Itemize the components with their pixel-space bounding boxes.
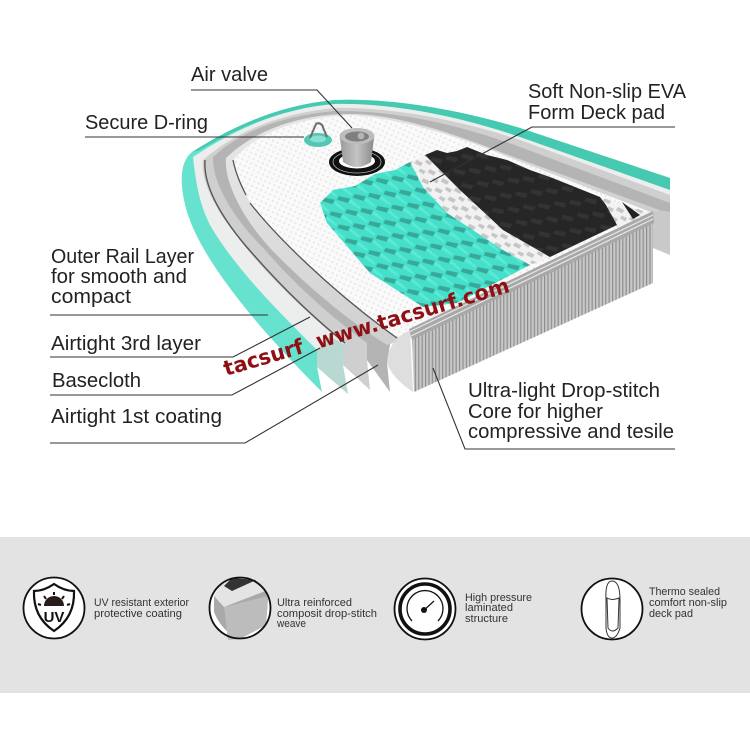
text: ultra reinforced: Ultra reinforced <box>277 597 352 609</box>
label: airtight 1st coating: Airtight 1st coating <box>51 406 222 428</box>
sheet: airtight 1st coating <box>213 111 670 392</box>
sheet: basecloth <box>203 108 670 390</box>
label: outer rail layer: for smooth and <box>51 266 187 288</box>
text: thermo sealed: deck pad <box>649 608 693 620</box>
label: airtight 1st coating <box>50 365 378 443</box>
text: thermo sealed: Thermo sealed <box>649 586 720 598</box>
label: outer rail layer <box>50 246 268 315</box>
watermark: tacsurf www.tacsurf.com <box>221 273 512 381</box>
label: ultra-light drop-stitch core: compressive and tesile <box>468 421 674 443</box>
label: airtight 3rd layer: Airtight 3rd layer <box>51 333 201 355</box>
black deck pad <box>425 147 617 257</box>
label: soft non-slip EVA form deck pad <box>430 81 687 182</box>
inner band <box>226 114 665 345</box>
label: secure D-ring: Secure D-ring <box>85 112 208 134</box>
label: outer rail layer: compact <box>51 286 131 308</box>
text: ultra reinforced: weave <box>276 618 306 630</box>
bottom feature band <box>0 537 750 693</box>
white grey deck pad strip <box>410 155 550 265</box>
label: basecloth <box>50 348 320 395</box>
icon: drop-stitch weave <box>210 578 270 640</box>
right end flaps <box>653 211 670 255</box>
label: ultra-light drop-stitch core: Core for higher <box>468 401 603 423</box>
label: outer rail layer: Outer Rail Layer <box>51 246 194 268</box>
text: high pressure: laminated <box>465 602 513 614</box>
label: soft non-slip EVA form deck pad: Soft Non-slip EVA <box>528 81 687 103</box>
drop-stitch core side <box>412 222 653 392</box>
text: high pressure: structure <box>465 613 508 625</box>
text: ultra reinforced: composit drop-stitch <box>277 608 377 620</box>
teal deck pad <box>320 162 530 307</box>
label: soft non-slip EVA form deck pad: Form Deck pad <box>528 102 665 124</box>
label: airtight 3rd layer <box>50 317 310 357</box>
core top lip <box>409 211 654 340</box>
label: ultra-light drop-stitch core: Ultra-light Drop-stitch <box>468 380 660 402</box>
sheet: airtight 3rd layer <box>193 104 670 394</box>
board cutaway illustration <box>182 100 670 394</box>
icon: board <box>582 578 642 640</box>
text: UV resistant: UV resistant exterior <box>94 597 189 609</box>
outer teal rail layer <box>182 100 670 392</box>
fin: airtight 3rd layer end <box>317 336 348 394</box>
icon: UV shield <box>24 578 84 638</box>
deck edge dark lines <box>233 160 397 338</box>
small black pad corner <box>622 202 640 219</box>
top teal band <box>192 100 670 192</box>
icon: pressure gauge <box>394 578 456 640</box>
text: high pressure: High pressure <box>465 592 532 604</box>
grey right pad strip <box>600 197 650 227</box>
label: basecloth: Basecloth <box>52 370 141 392</box>
label: air valve: Air valve <box>191 64 268 86</box>
drop-stitch core end <box>387 330 413 392</box>
label: air valve <box>191 64 352 128</box>
icon: UV shield: UV <box>44 609 64 626</box>
deck white surface <box>233 115 653 338</box>
text: thermo sealed: comfort non-slip <box>649 597 727 609</box>
dark seam line <box>205 160 345 343</box>
air valve <box>329 128 385 176</box>
label: ultra-light drop-stitch core <box>433 368 675 449</box>
text: UV resistant: protective coating <box>94 608 182 620</box>
secure D-ring <box>304 123 332 147</box>
